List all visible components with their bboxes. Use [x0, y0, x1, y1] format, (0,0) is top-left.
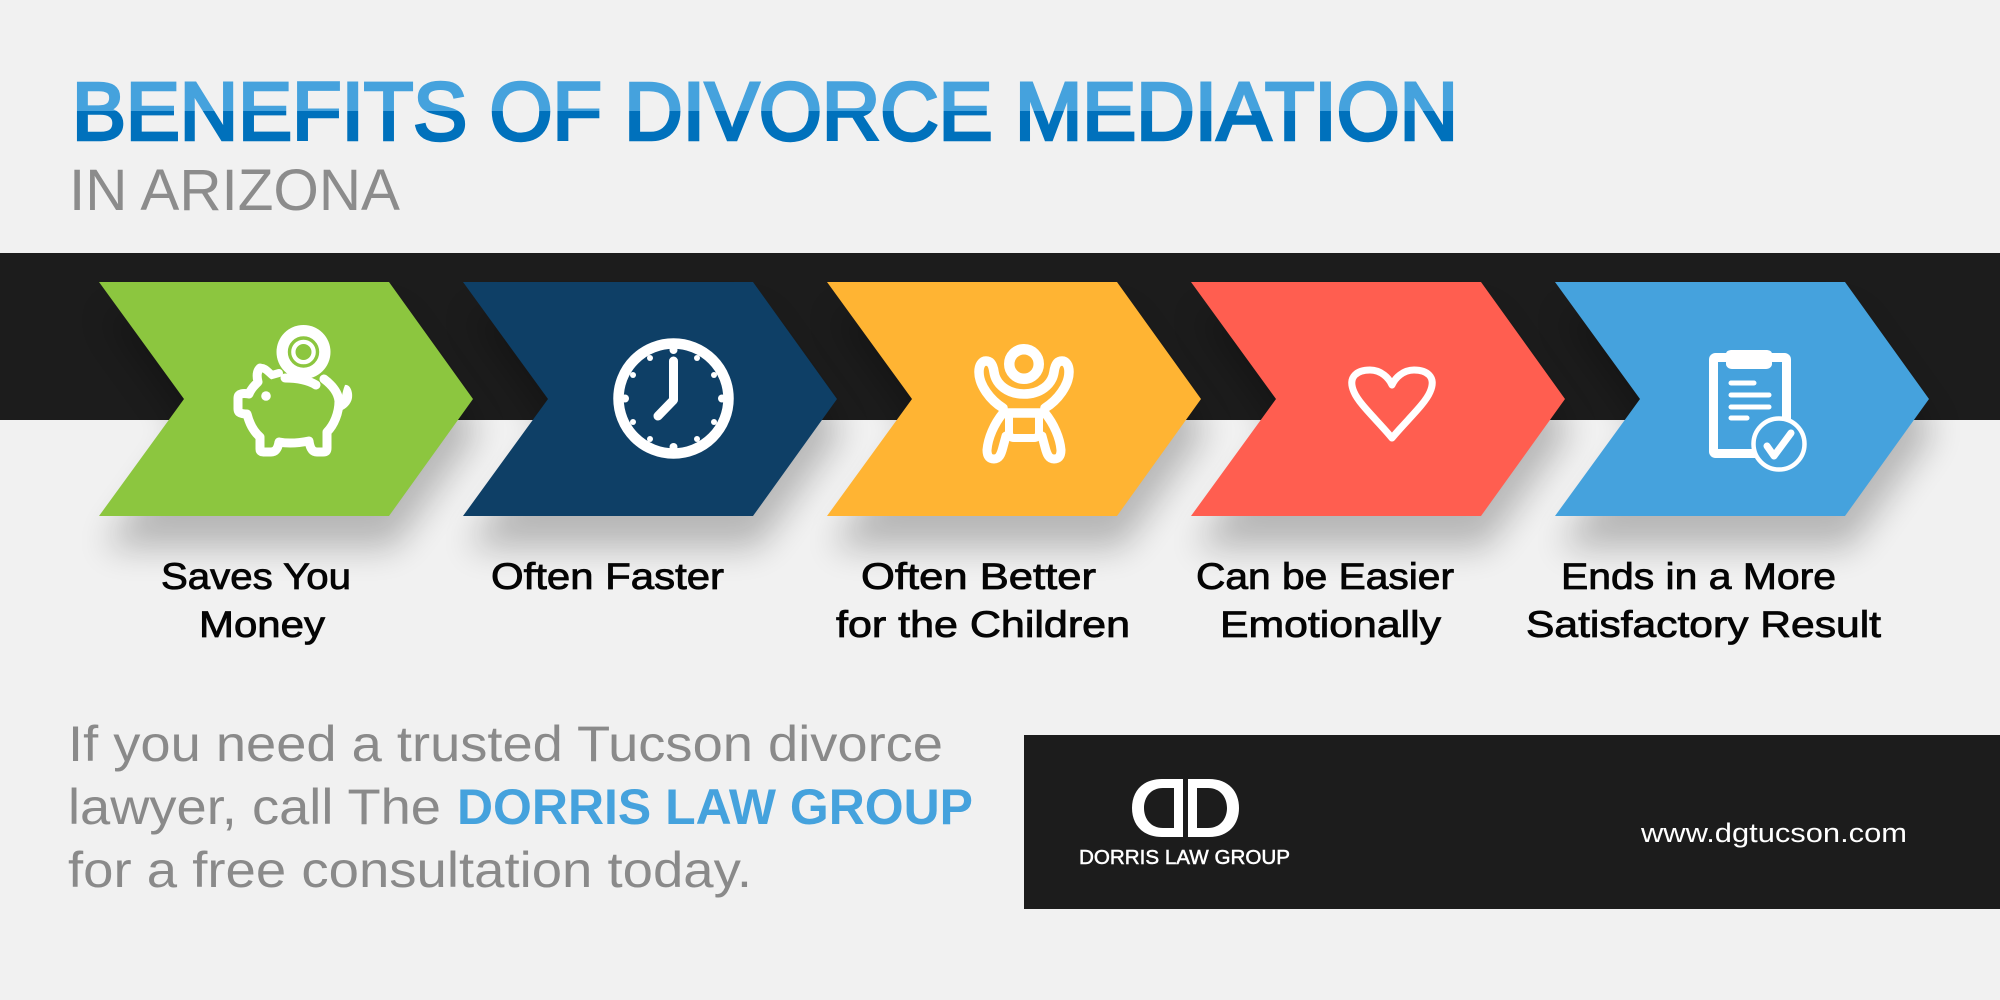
panel: satisfactory result chevron	[1555, 282, 1934, 548]
panel: footer contact box	[1024, 735, 2000, 909]
label: can be easier emotionally: Emotionally	[1220, 604, 1442, 645]
label: ends in a more satisfactory result	[1526, 556, 1882, 645]
label: often better for the children: Often Better	[861, 556, 1096, 597]
label: saves you money: Money	[199, 604, 326, 645]
icon: clipboard with check	[1714, 350, 1804, 470]
icon: heart	[1352, 370, 1432, 438]
subtitle: IN ARIZONA	[69, 158, 400, 223]
label: can be easier emotionally: Can be Easier	[1196, 556, 1454, 597]
panel: better for children chevron	[827, 282, 1206, 548]
icon: clock	[618, 344, 728, 454]
label: ends in a more satisfactory result: Satisfactory Result	[1526, 604, 1882, 645]
black band	[0, 253, 2000, 420]
call to action text: If you need a trusted Tucson divorce	[68, 716, 943, 772]
label: saves you money	[161, 556, 351, 645]
icon: DD logo	[1132, 779, 1239, 837]
label: often faster: Often Faster	[491, 556, 724, 597]
panel: easier emotionally chevron	[1191, 282, 1570, 548]
icon: piggy bank	[238, 325, 352, 452]
label: can be easier emotionally	[1196, 556, 1454, 645]
label: ends in a more satisfactory result: Ends in a More	[1561, 556, 1836, 597]
label: saves you money: Saves You	[161, 556, 351, 597]
call to action text: for a free consultation today.	[68, 842, 752, 898]
logo wordmark: DORRIS LAW GROUP	[1079, 847, 1290, 869]
title: BENEFITS OF DIVORCE MEDIATION	[72, 66, 1458, 158]
website url: www.dgtucson.com	[1640, 818, 1907, 848]
call to action text: lawyer, call The	[68, 779, 441, 835]
panel: saves you money chevron	[99, 282, 478, 548]
label: often better for the children: for the Children	[836, 604, 1130, 645]
call to action text	[68, 716, 973, 898]
panel: often faster chevron	[463, 282, 842, 548]
label: often better for the children	[836, 556, 1130, 645]
icon: baby	[979, 349, 1069, 459]
call to action text: DORRIS LAW GROUP	[457, 779, 973, 835]
